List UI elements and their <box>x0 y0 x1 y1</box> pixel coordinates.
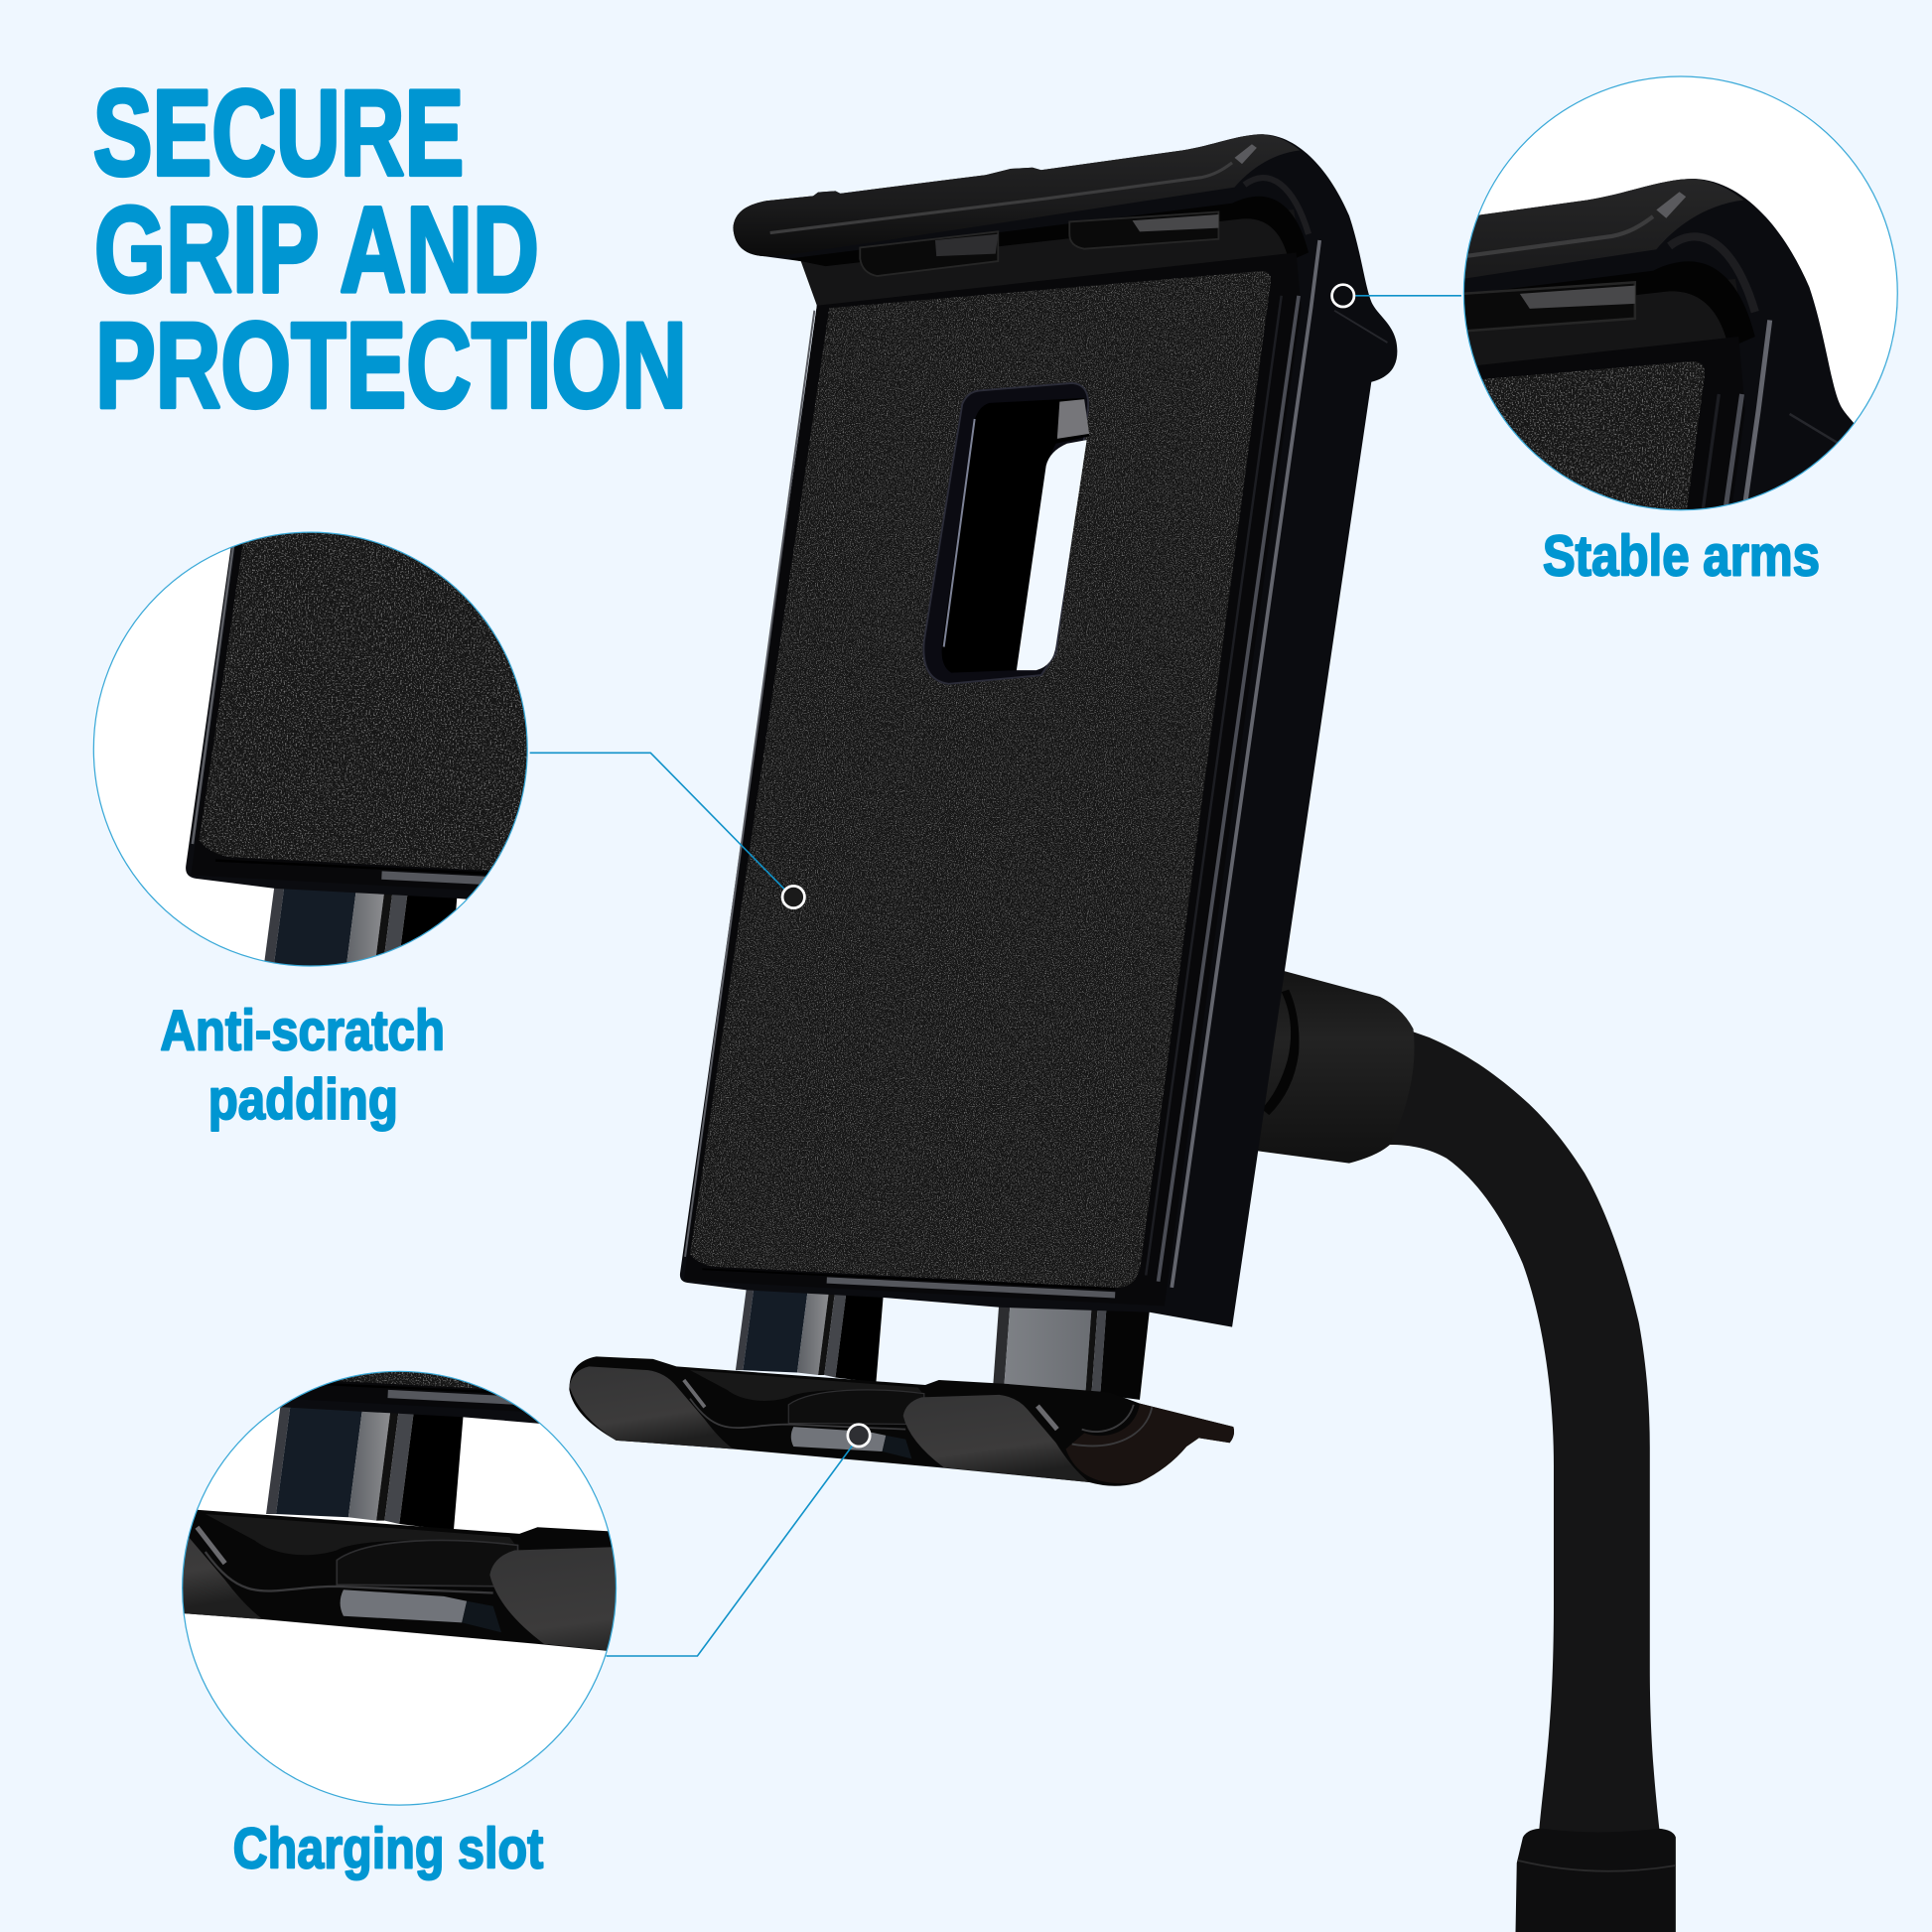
label: anti-scratch padding: padding <box>208 1068 398 1132</box>
label: stable arms: Stable arms <box>1543 525 1820 589</box>
title <box>93 66 687 434</box>
joint ring <box>1262 990 1300 1115</box>
title: PROTECTION <box>95 298 687 434</box>
title: GRIP AND <box>94 183 539 319</box>
marker: padding <box>782 886 804 908</box>
connector line: padding <box>530 753 785 890</box>
label: charging slot: Charging slot <box>233 1817 543 1880</box>
flexible neck <box>1390 1029 1660 1832</box>
connector line: charging slot <box>607 1446 853 1656</box>
label: anti-scratch padding <box>160 999 445 1132</box>
title: SECURE <box>93 66 464 202</box>
callout: charging slot <box>182 1370 618 1880</box>
detail circle: padding <box>93 532 528 967</box>
label: anti-scratch padding: Anti-scratch <box>160 999 445 1062</box>
collar <box>1516 1829 1676 1932</box>
callout: anti-scratch padding <box>93 532 528 1132</box>
connector line: stable arms <box>1355 295 1461 297</box>
marker: charging slot <box>848 1425 870 1447</box>
gooseneck stand <box>1257 971 1676 1932</box>
tablet holder <box>569 134 1397 1486</box>
connector sleeve <box>1257 971 1415 1164</box>
detail circle: stable arms <box>1463 75 1898 510</box>
detail circle: charging slot <box>182 1370 618 1806</box>
marker: stable arms <box>1332 285 1354 307</box>
callout: stable arms <box>1463 75 1898 577</box>
